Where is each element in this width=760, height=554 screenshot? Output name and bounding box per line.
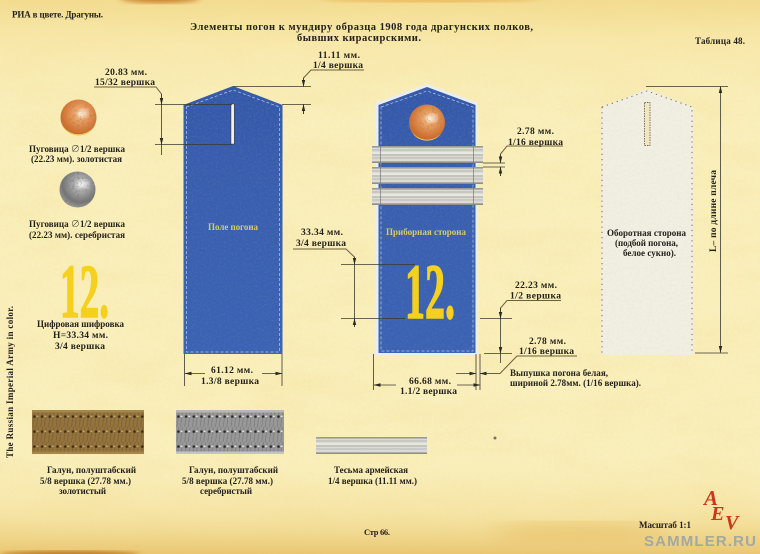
dimension: 20.83 mm: 20.83 мм. — [105, 68, 147, 78]
dimension: 11.11 mm — [233, 51, 364, 114]
army tape caption: 1/4 вершка (11.11 мм.) — [328, 476, 417, 486]
table number: Таблица 48. — [695, 36, 745, 46]
dimension: 2.78 mm piping: 1/16 вершка — [519, 347, 574, 357]
page number: Стр 66. — [364, 527, 390, 537]
silver braid caption: Галун, полуштабский — [189, 465, 278, 475]
dimension: 11.11 mm: 11.11 мм. — [318, 51, 360, 61]
gold button caption: (22.23 мм). золотистая — [31, 154, 122, 164]
piping note: Выпушка погона белая, — [510, 368, 608, 378]
silver braid sample — [176, 410, 284, 454]
dimension: 22.23 mm: 22.23 мм. — [515, 281, 557, 291]
silver braid caption — [182, 465, 278, 496]
gold braid sample — [32, 410, 144, 454]
vertical side caption: The Russian Imperial Army in color. — [5, 306, 15, 458]
numeric cipher caption — [37, 319, 124, 352]
dimension: 66.68 mm: 1.1/2 вершка — [400, 387, 457, 397]
dimension: 33.34 mm: 3/4 вершка — [296, 239, 346, 249]
dimension: 2.78 mm piping: 2.78 мм. — [529, 337, 566, 347]
gold button caption — [29, 144, 126, 164]
front numeric cipher: 12. — [405, 248, 455, 335]
braid stripes — [372, 146, 483, 205]
panel: gold button — [60, 100, 96, 136]
dimension: 2.78 mm braid gap: 2.78 мм. — [517, 127, 554, 137]
numeric cipher caption: Цифровая шифровка — [37, 319, 124, 329]
dimension: 22.23 mm: 1/2 вершка — [510, 292, 561, 302]
gold button caption: Пуговица ∅1/2 вершка — [29, 144, 126, 154]
dimension: 2.78 mm braid gap — [483, 127, 563, 176]
dimension: 11.11 mm: 1/4 вершка — [313, 61, 363, 71]
reverse slit — [644, 102, 650, 146]
piping note: шириной 2.78мм. (1/16 вершка). — [510, 378, 641, 388]
gold braid caption — [40, 465, 136, 496]
monogram: E — [710, 503, 724, 525]
monogram: V — [725, 512, 740, 534]
dimension: 2.78 mm piping — [456, 337, 577, 390]
silver braid caption: 5/8 вершка (27.78 мм.) — [182, 476, 273, 486]
reverse caption: Оборотная сторона — [607, 228, 686, 238]
army tape sample — [316, 437, 427, 454]
army tape caption — [328, 465, 417, 486]
numeric cipher caption: 3/4 вершка — [55, 342, 105, 352]
panel: shoulder board reverse — [602, 89, 693, 355]
gold braid caption: 5/8 вершка (27.78 мм.) — [40, 476, 131, 486]
panel: shoulder board field — [184, 86, 282, 354]
dimension: overall length — [646, 86, 728, 353]
piping note — [510, 368, 641, 388]
dimension: overall length: L– по длине плеча — [709, 170, 719, 252]
title: Элементы погон к мундиру образца 1908 года драгунских полков, — [190, 22, 533, 33]
title — [190, 22, 533, 44]
dimension: 20.83 mm — [94, 68, 232, 155]
dimension: 66.68 mm — [374, 354, 480, 397]
front label: Приборная сторона — [386, 227, 466, 237]
silver button caption: Пуговица ∅1/2 вершка — [29, 219, 126, 229]
dimension: 20.83 mm: 15/32 вершка — [95, 78, 155, 88]
dimension: 61.12 mm — [184, 354, 282, 387]
dimension: 2.78 mm braid gap: 1/16 вершка — [508, 138, 563, 148]
watermark: SAMMLER.RU — [644, 533, 756, 550]
panel: silver button — [60, 172, 96, 208]
silver button caption — [29, 219, 126, 240]
dimension: 61.12 mm: 61.12 мм. — [211, 366, 253, 376]
silver braid caption: серебристый — [200, 486, 252, 496]
header: series name: РИА в цвете. Драгуны. — [12, 10, 103, 20]
monogram: A — [702, 486, 718, 510]
numeric cipher sample: 12. — [60, 250, 109, 334]
silver button caption: (22.23 мм). серебристая — [29, 230, 125, 240]
reverse caption: (подбой погона, — [615, 238, 678, 248]
scale: Масштаб 1:1 — [639, 520, 692, 530]
dimension: 22.23 mm — [480, 281, 561, 363]
field label: Поле погона — [208, 222, 258, 232]
army tape caption: Тесьма армейская — [334, 465, 408, 475]
monogram — [702, 486, 740, 534]
front button — [409, 104, 445, 141]
dimension: 33.34 mm — [293, 228, 415, 327]
gold braid caption: Галун, полуштабский — [47, 465, 136, 475]
panel: shoulder board front — [372, 84, 483, 355]
reverse caption: белое сукно). — [623, 248, 676, 258]
dimension: 61.12 mm: 1.3/8 вершка — [201, 377, 259, 387]
reverse caption — [607, 228, 686, 258]
buttonhole slit — [231, 104, 234, 144]
dimension: 33.34 mm: 33.34 мм. — [301, 228, 343, 238]
gold braid caption: золотистый — [59, 486, 106, 496]
title: бывших кирасирскими. — [297, 33, 421, 44]
numeric cipher caption: Н=33.34 мм. — [53, 331, 108, 341]
dimension: 66.68 mm: 66.68 мм. — [409, 377, 451, 387]
